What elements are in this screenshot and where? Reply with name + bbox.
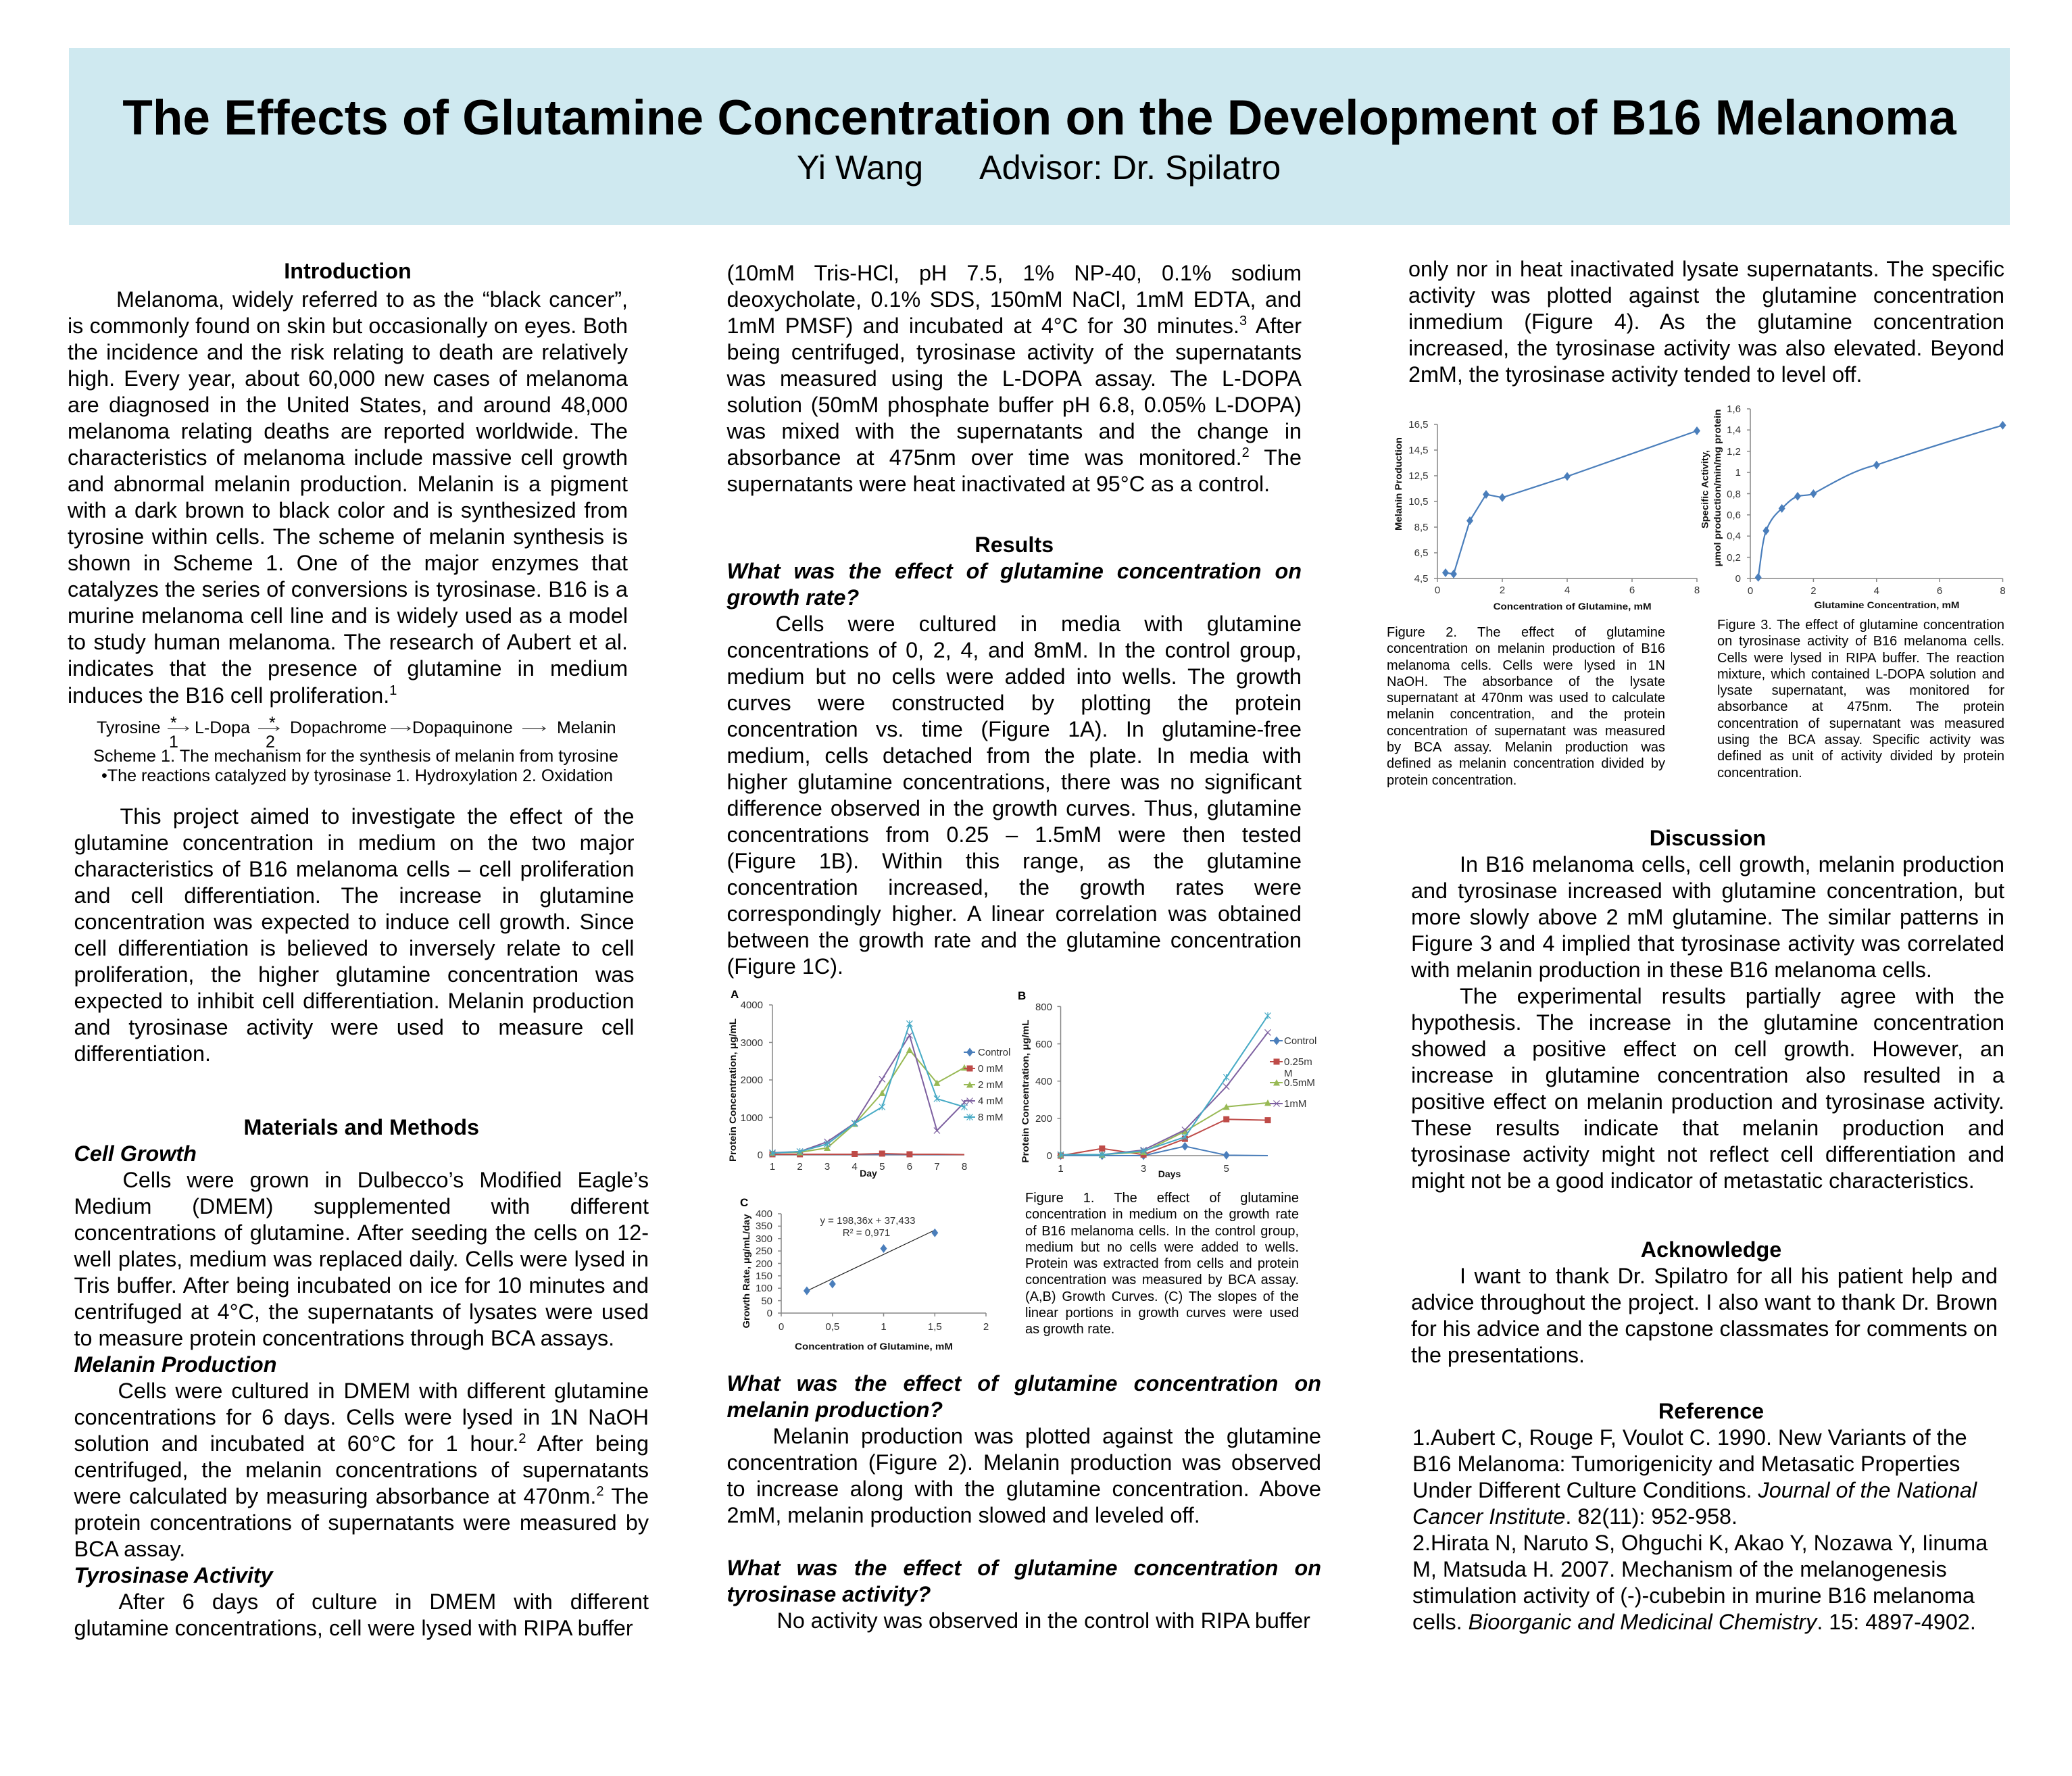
scheme 1: melanin synthesis: Dopaquinone bbox=[412, 718, 513, 737]
text block: introduction body: are diagnosed in the United States, and around 48,000 bbox=[68, 393, 628, 417]
chart: figure 3 tyrosinase activity: 0,4 bbox=[1727, 531, 1741, 542]
chart B: protein concentration vs days: 5 bbox=[1224, 1163, 1229, 1175]
caption: figure 3: concentration. bbox=[1717, 766, 1802, 781]
caption: figure 3 bbox=[1717, 618, 2004, 781]
text block: project aim: expected to inhibit cell differentiation. Melanin production bbox=[74, 989, 634, 1013]
chart: figure 2 melanin production bbox=[1393, 419, 1700, 612]
question: tyrosinase activity bbox=[727, 1556, 1321, 1606]
text block: growth rate results: concentrations of 0, 2, 4, and 8mM. In the control group, bbox=[727, 638, 1302, 662]
subheading: melanin production: Melanin Production bbox=[74, 1352, 276, 1377]
chart C: growth rate vs glutamine: 350 bbox=[756, 1220, 772, 1232]
text block: melanin results: to increase along with the glutamine concentration. Above bbox=[727, 1477, 1321, 1501]
chart: figure 2 melanin production: 2 bbox=[1500, 585, 1505, 596]
caption: figure 1: Protein was extracted from cells and protein bbox=[1025, 1256, 1299, 1271]
chart: figure 3 tyrosinase activity: 0,6 bbox=[1727, 510, 1741, 521]
chart: figure 3 tyrosinase activity bbox=[1699, 403, 2006, 610]
text block: tyrosinase results start: No activity was observed in the control with RIPA buffer bbox=[777, 1608, 1310, 1633]
text block: reference list: 2.Hirata N, Naruto S, Ohguchi K, Akao Y, Nozawa Y, Iinuma bbox=[1412, 1531, 1988, 1555]
chart: figure 2 melanin production: 4,5 bbox=[1414, 573, 1429, 585]
chart A: protein concentration vs day: 1 bbox=[770, 1161, 775, 1173]
text block: melanin production bbox=[74, 1379, 649, 1561]
text block: growth rate results: Cells were cultured in media with glutamine bbox=[776, 612, 1302, 636]
subheading: tyrosinase activity: Tyrosinase Activity bbox=[74, 1563, 273, 1587]
chart: figure 3 tyrosinase activity: 4 bbox=[1874, 585, 1879, 597]
legend: chart A: 4 mM bbox=[978, 1095, 1003, 1107]
panel: results growth rate bbox=[726, 533, 1302, 979]
chart B: protein concentration vs days: Protein Concentration, μg/mL bbox=[1020, 1019, 1031, 1163]
question: growth rate bbox=[726, 559, 1302, 610]
scheme 1: melanin synthesis: Melanin bbox=[557, 718, 616, 737]
panel: introduction bbox=[68, 259, 628, 707]
text block: cell growth: Tris buffer. After being incubated on ice for 10 minutes and bbox=[74, 1273, 649, 1298]
text block: melanin results: concentration (Figure 2). Melanin production was observed bbox=[727, 1450, 1321, 1475]
chart: figure 3 tyrosinase activity: 6 bbox=[1937, 585, 1942, 597]
text block: tyrosinase activity bbox=[74, 1589, 649, 1640]
chart: figure 3 tyrosinase activity: 1 bbox=[1735, 467, 1741, 478]
chart C: growth rate vs glutamine: C bbox=[740, 1196, 748, 1209]
arrow: dopaquinone to melanin bbox=[522, 726, 545, 731]
chart C: growth rate vs glutamine: Concentration of Glutamine, mM bbox=[795, 1341, 953, 1352]
scheme 1: melanin synthesis: * bbox=[269, 714, 276, 733]
title: The Effects of Glutamine Concentration on the Development of B16 Melanoma bbox=[122, 91, 1956, 145]
chart: figure 2 melanin production: 4 bbox=[1564, 585, 1570, 596]
caption: figure 1: linear portions in growth curves were used bbox=[1025, 1306, 1299, 1321]
chart: figure 2 melanin production: 0 bbox=[1435, 585, 1440, 596]
text block: reference list: Under Different Culture Conditions. Journal of the National bbox=[1412, 1478, 1977, 1502]
question: tyrosinase activity: What was the effect of glutamine concentration on bbox=[727, 1556, 1321, 1580]
chart C: growth rate vs glutamine: 2 bbox=[983, 1321, 989, 1333]
chart: figure 2 melanin production: 10,5 bbox=[1408, 496, 1429, 508]
text block: discussion body: more slowly above 2 mM glutamine. The similar patterns in bbox=[1411, 905, 2004, 929]
caption: figure 1: of B16 melanoma cells. In the control group, bbox=[1025, 1224, 1299, 1239]
legend: chart B: 1mM bbox=[1284, 1098, 1306, 1110]
text block: methods continued: solution (50mM phosphate buffer pH 6.8, 0.05% L-DOPA) bbox=[727, 393, 1302, 417]
scheme 1: melanin synthesis: Tyrosine bbox=[97, 718, 160, 737]
text block: tyrosinase activity: glutamine concentrations, cell were lysed with RIPA buffer bbox=[74, 1616, 633, 1640]
caption: figure 2: concentration of supernatant was measured bbox=[1387, 724, 1665, 739]
text block: methods continued: supernatants were heat inactivated at 95°C as a control. bbox=[727, 472, 1270, 496]
text block: melanin production: centrifuged, the melanin concentrations of supernatants bbox=[74, 1458, 649, 1482]
text block: growth rate results: medium, cells detached from the plate. In media with bbox=[727, 743, 1302, 768]
scheme 1: melanin synthesis bbox=[93, 714, 618, 785]
chart B: protein concentration vs days: Days bbox=[1158, 1168, 1181, 1179]
chart A: protein concentration vs day: 3000 bbox=[741, 1037, 763, 1049]
text block: growth rate results: difference observed in the growth curves. Thus, glutamine bbox=[727, 796, 1302, 820]
chart A: protein concentration vs day: 7 bbox=[934, 1161, 940, 1173]
chart: figure 2 melanin production: Concentration of Glutamine, mM bbox=[1494, 601, 1652, 612]
chart B: protein concentration vs days: 600 bbox=[1035, 1039, 1052, 1050]
heading: materials and methods: Materials and Methods bbox=[243, 1115, 479, 1139]
text block: introduction body: shown in Scheme 1. One of the major enzymes that bbox=[68, 551, 628, 575]
text block: melanin production: BCA assay. bbox=[74, 1537, 185, 1561]
caption: figure 3: concentration of supernatant was measured bbox=[1717, 716, 2004, 731]
chart: figure 3 tyrosinase activity: 2 bbox=[1810, 585, 1817, 597]
chart A: protein concentration vs day: 4 bbox=[852, 1161, 858, 1173]
caption: figure 1: as growth rate. bbox=[1025, 1322, 1114, 1337]
text block: introduction body: murine melanoma cell line and is widely used as a model bbox=[68, 603, 628, 628]
text block: melanin production: solution and incubated at 60°C for 1 hour.2 After being bbox=[74, 1431, 649, 1456]
question: melanin production bbox=[727, 1371, 1321, 1422]
caption: figure 3: defined as unit of activity divided by protein bbox=[1717, 749, 2004, 764]
legend: chart A bbox=[964, 1047, 1010, 1123]
text block: project aim bbox=[74, 804, 634, 1066]
chart: figure 2 melanin production: Melanin Production bbox=[1393, 437, 1404, 531]
text block: introduction body: melanoma relating deaths are reported worldwide. The bbox=[68, 419, 628, 443]
chart C: growth rate vs glutamine: R² = 0,971 bbox=[843, 1227, 890, 1239]
scheme 1: melanin synthesis: * bbox=[170, 714, 177, 733]
text block: introduction body: characteristics of melanoma include massive cell growth bbox=[68, 445, 628, 470]
text block: tyrosinase results continued: inmedium (Figure 4). As the glutamine concentration bbox=[1408, 310, 2004, 334]
text block: discussion body: In B16 melanoma cells, cell growth, melanin production bbox=[1460, 852, 2004, 877]
text block: growth rate results: medium but no cells were added into wells. The growth bbox=[727, 664, 1302, 689]
heading: discussion: Discussion bbox=[1650, 826, 1766, 850]
caption: figure 1 bbox=[1025, 1191, 1299, 1337]
chart C: growth rate vs glutamine: 0,5 bbox=[825, 1321, 839, 1333]
chart B: protein concentration vs days: 0 bbox=[1047, 1150, 1052, 1162]
text block: tyrosinase results continued: increased, the tyrosinase activity was also elevated. Beyond bbox=[1408, 336, 2004, 360]
text block: cell growth: to measure protein concentrations through BCA assays. bbox=[74, 1326, 614, 1350]
text block: discussion body: increase in glutamine concentration also resulted in a bbox=[1411, 1063, 2004, 1087]
text block: introduction body: is commonly found on skin but occasionally on eyes. Both bbox=[68, 314, 628, 338]
chart A: protein concentration vs day: 5 bbox=[879, 1161, 885, 1173]
text block: discussion body: positive effect on melanin production and tyrosinase activity. bbox=[1411, 1089, 2004, 1114]
chart: figure 3 tyrosinase activity: Specific Activity, bbox=[1699, 450, 1710, 528]
text block: acknowledge body: advice throughout the project. I also want to thank Dr. Brown bbox=[1411, 1290, 1998, 1314]
legend: chart A: 0 mM bbox=[978, 1063, 1003, 1075]
chart C: growth rate vs glutamine: 0 bbox=[779, 1321, 784, 1333]
chart: figure 2 melanin production: 8 bbox=[1694, 585, 1700, 596]
chart: figure 2 melanin production: 6 bbox=[1629, 585, 1635, 596]
text block: project aim: and tyrosinase activity were used to measure cell bbox=[74, 1015, 634, 1039]
text block: reference list: B16 Melanoma: Tumorigenicity and Metasatic Properties bbox=[1412, 1452, 1960, 1476]
chart B: protein concentration vs days bbox=[1018, 989, 1316, 1179]
text block: introduction body: with a dark brown to black color and is synthesized from bbox=[68, 498, 628, 522]
text block: introduction body: catalyzes the series of conversions is tyrosinase. B16 is a bbox=[68, 577, 628, 601]
caption: figure 2: NaOH. The absorbance of the lysate bbox=[1387, 674, 1665, 689]
text block: growth rate results: (Figure 1B). Within this range, as the glutamine bbox=[727, 849, 1302, 873]
text block: tyrosinase results continued: 2mM, the tyrosinase activity tended to level off. bbox=[1408, 362, 1862, 387]
chart: figure 3 tyrosinase activity: 1,2 bbox=[1727, 446, 1741, 458]
legend: chart A: Control bbox=[978, 1047, 1010, 1058]
caption: figure 2 bbox=[1387, 625, 1665, 788]
chart: figure 3 tyrosinase activity: 1,6 bbox=[1727, 403, 1741, 415]
chart A: protein concentration vs day bbox=[727, 988, 1010, 1179]
text block: project aim: characteristics of B16 melanoma cells – cell proliferation bbox=[74, 857, 634, 881]
chart C: growth rate vs glutamine: 300 bbox=[756, 1233, 772, 1245]
text block: introduction body: high. Every year, about 60,000 new cases of melanoma bbox=[68, 366, 628, 391]
chart C: growth rate vs glutamine: 1,5 bbox=[928, 1321, 942, 1333]
chart B: protein concentration vs days: B bbox=[1018, 989, 1026, 1002]
chart: figure 2 melanin production: 6,5 bbox=[1414, 547, 1429, 559]
legend: chart B bbox=[1270, 1035, 1316, 1110]
text block: introduction body: the incidence and the risk relating to death are relatively bbox=[68, 340, 628, 364]
chart B: protein concentration vs days: 3 bbox=[1141, 1163, 1146, 1175]
chart: figure 2 melanin production: 8,5 bbox=[1414, 522, 1429, 533]
text block: introduction body: and abnormal melanin production. Melanin is a pigment bbox=[68, 472, 628, 496]
text block: introduction body: to study human melanoma. The research of Aubert et al. bbox=[68, 630, 628, 654]
scheme 1: melanin synthesis: Scheme 1. The mechanism for the synthesis of melanin from tyrosine bbox=[93, 747, 618, 766]
chart B: protein concentration vs days: 800 bbox=[1035, 1002, 1052, 1013]
caption: figure 2: melanoma cells. Cells were lysed in 1N bbox=[1387, 658, 1665, 673]
text block: introduction body: induces the B16 cell proliferation.1 bbox=[68, 683, 397, 707]
caption: figure 3: lysate supernatant, was monitored for bbox=[1717, 683, 2004, 698]
caption: figure 1: medium but no cells were added to wells. bbox=[1025, 1240, 1299, 1255]
text block: cell growth: Cells were grown in Dulbecco’s Modified Eagle’s bbox=[123, 1168, 649, 1192]
text block: discussion body: showed a positive effect on cell growth. However, an bbox=[1411, 1037, 2004, 1061]
chart A: protein concentration vs day: 1000 bbox=[741, 1112, 763, 1124]
question: tyrosinase activity: tyrosinase activity? bbox=[727, 1582, 931, 1606]
text block: introduction body bbox=[68, 287, 628, 707]
text block: reference list: cells. Bioorganic and Medicinal Chemistry. 15: 4897-4902. bbox=[1412, 1610, 1976, 1634]
panel: discussion bbox=[1411, 826, 2004, 1193]
chart B: protein concentration vs days: 200 bbox=[1035, 1113, 1052, 1125]
chart: figure 3 tyrosinase activity: 0 bbox=[1748, 585, 1753, 597]
heading: acknowledge: Acknowledge bbox=[1641, 1237, 1781, 1262]
caption: figure 2: defined as melanin concentration divided by bbox=[1387, 756, 1665, 771]
text block: cell growth: Medium (DMEM) supplemented with different bbox=[74, 1194, 649, 1218]
text block: growth rate results: higher glutamine concentrations, there was no significant bbox=[727, 770, 1302, 794]
chart C: growth rate vs glutamine: Growth Rate, μg/mL/day bbox=[741, 1214, 751, 1328]
caption: figure 2: by BCA assay. Melanin production was bbox=[1387, 740, 1665, 755]
caption: figure 2: concentration on melanin production of B16 bbox=[1387, 641, 1665, 656]
text block: reference list: Cancer Institute. 82(11): 952-958. bbox=[1412, 1504, 1737, 1529]
text block: melanin results: Melanin production was plotted against the glutamine bbox=[773, 1424, 1321, 1448]
chart A: protein concentration vs day: Day bbox=[860, 1168, 877, 1179]
text block: tyrosinase results continued: activity was plotted against the glutamine concentration bbox=[1408, 283, 2004, 307]
chart: figure 2 melanin production: 16,5 bbox=[1408, 419, 1429, 430]
text block: discussion body: might not be a good indicator of metastatic characteristics. bbox=[1411, 1168, 1975, 1193]
scheme 1: melanin synthesis: 2 bbox=[266, 733, 275, 751]
text block: introduction body: indicates that the presence of glutamine in medium bbox=[68, 656, 628, 681]
caption: figure 2: Figure 2. The effect of glutamine bbox=[1387, 625, 1665, 640]
panel: acknowledge bbox=[1411, 1237, 1998, 1367]
text block: project aim: proliferation, the higher glutamine concentration was bbox=[74, 962, 634, 987]
text block: acknowledge body: for his advice and the capstone classmates for comments on bbox=[1411, 1316, 1998, 1341]
text block: project aim: glutamine concentration in medium on the two major bbox=[74, 831, 634, 855]
scheme 1: melanin synthesis: Dopachrome bbox=[290, 718, 387, 737]
chart: figure 3 tyrosinase activity: 0 bbox=[1735, 573, 1741, 585]
text block: methods continued bbox=[727, 261, 1302, 496]
text block: project aim: differentiation. bbox=[74, 1041, 211, 1066]
caption: figure 3: Figure 3. The effect of glutamine concentration bbox=[1717, 618, 2004, 633]
chart C: growth rate vs glutamine: 400 bbox=[756, 1208, 772, 1220]
text block: discussion body: and tyrosinase increased with glutamine concentration, but bbox=[1411, 879, 2004, 903]
caption: figure 3: absorbance at 475nm. The protein bbox=[1717, 699, 2004, 714]
chart B: protein concentration vs days: 400 bbox=[1035, 1076, 1052, 1087]
caption: figure 3: using the BCA assay. Specific activity was bbox=[1717, 733, 2004, 747]
text block: discussion body: The experimental results partially agree with the bbox=[1460, 984, 2004, 1008]
caption: figure 3: mixture, which contained L-DOPA solution and bbox=[1717, 667, 2004, 682]
text block: melanin production: concentrations for 6 days. Cells were lysed in 1N NaOH bbox=[74, 1405, 649, 1429]
text block: introduction body: Melanoma, widely referred to as the “black cancer”, bbox=[116, 287, 628, 312]
text block: acknowledge body: the presentations. bbox=[1411, 1343, 1585, 1367]
caption: figure 3: Cells were lysed in RIPA buffer. The reaction bbox=[1717, 651, 2004, 666]
heading: reference: Reference bbox=[1658, 1399, 1764, 1423]
text block: discussion body: tyrosinase activity might not reflect cell differentiation and bbox=[1411, 1142, 2004, 1166]
heading: introduction: Introduction bbox=[284, 259, 412, 283]
text block: acknowledge body: I want to thank Dr. Spilatro for all his patient help and bbox=[1460, 1264, 1998, 1288]
text block: discussion body: with melanin production in these B16 melanoma cells. bbox=[1411, 958, 1932, 982]
legend: chart A: 2 mM bbox=[978, 1079, 1003, 1091]
text block: reference list: M, Matsuda H. 2007. Mechanism of the melanogenesis bbox=[1412, 1557, 1947, 1581]
text block: methods continued: absorbance at 475nm over time was monitored.2 The bbox=[727, 445, 1302, 470]
arrow: tyrosine to L-Dopa bbox=[168, 726, 189, 731]
chart: figure 3 tyrosinase activity: 8 bbox=[2000, 585, 2006, 597]
arrow: L-Dopa to dopachrome bbox=[258, 726, 279, 731]
text block: project aim: This project aimed to investigate the effect of the bbox=[120, 804, 634, 829]
text block: growth rate results: concentration increased, the growth rates were bbox=[727, 875, 1302, 899]
text block: growth rate results: curves were constructed by plotting the protein bbox=[727, 691, 1302, 715]
text block: growth rate results: correspondingly higher. A linear correlation was obtained bbox=[727, 902, 1302, 926]
chart A: protein concentration vs day: 4000 bbox=[741, 1000, 763, 1011]
text block: cell growth: centrifuged at 4°C, the supernatants of lysates were used bbox=[74, 1300, 649, 1324]
chart C: growth rate vs glutamine: 100 bbox=[756, 1283, 772, 1294]
caption: figure 2: melanin concentration, and the protein bbox=[1387, 707, 1665, 722]
chart C: growth rate vs glutamine: y = 198,36x + 37,433 bbox=[820, 1215, 915, 1227]
arrow: dopachrome to dopaquinone bbox=[391, 726, 410, 731]
text block: discussion body: hypothesis. The increase in the glutamine concentration bbox=[1411, 1010, 2004, 1035]
text block: tyrosinase activity: After 6 days of culture in DMEM with different bbox=[119, 1589, 649, 1614]
question: melanin production: melanin production? bbox=[727, 1398, 943, 1422]
caption: figure 1: Figure 1. The effect of glutamine bbox=[1025, 1191, 1299, 1206]
chart A: protein concentration vs day: 0 bbox=[758, 1150, 763, 1161]
question: melanin production: What was the effect of glutamine concentration on bbox=[727, 1371, 1321, 1395]
text block: tyrosinase results continued bbox=[1408, 257, 2004, 387]
chart: figure 3 tyrosinase activity: Glutamine Concentration, mM bbox=[1814, 599, 1960, 610]
legend: chart B: 0.5mM bbox=[1284, 1077, 1315, 1089]
text block: melanin production: protein concentrations of supernatants were measured by bbox=[74, 1510, 649, 1535]
heading: results: Results bbox=[975, 533, 1054, 557]
text block: methods continued: (10mM Tris-HCl, pH 7.5, 1% NP-40, 0.1% sodium bbox=[727, 261, 1302, 285]
text block: methods continued: was measured using the L-DOPA assay. The L-DOPA bbox=[727, 366, 1302, 391]
text block: cell growth bbox=[74, 1168, 649, 1350]
chart A: protein concentration vs day: Protein Concentration, μg/mL bbox=[727, 1018, 738, 1162]
text block: methods continued: 1mM PMSF) and incubated at 4°C for 30 minutes.3 After bbox=[727, 314, 1302, 338]
chart C: growth rate vs glutamine: 250 bbox=[756, 1245, 772, 1257]
chart A: protein concentration vs day: 2 bbox=[797, 1161, 803, 1173]
text block: discussion body: These results indicate that melanin production and bbox=[1411, 1116, 2004, 1140]
chart: figure 3 tyrosinase activity: 0,8 bbox=[1727, 489, 1741, 500]
advisor: Advisor: Dr. Spilatro bbox=[979, 148, 1281, 187]
text block: cell growth: concentrations of glutamine. After seeding the cells on 12- bbox=[74, 1220, 649, 1245]
chart: figure 3 tyrosinase activity: 1,4 bbox=[1727, 424, 1741, 436]
chart A: protein concentration vs day: 3 bbox=[824, 1161, 830, 1173]
text block: discussion body bbox=[1411, 852, 2004, 1193]
text block: growth rate results: (Figure 1C). bbox=[727, 954, 843, 979]
text block: acknowledge body bbox=[1411, 1264, 1998, 1367]
text block: reference list: 1.Aubert C, Rouge F, Voulot C. 1990. New Variants of the bbox=[1412, 1425, 1967, 1450]
chart: figure 3 tyrosinase activity: μmol production/min/mg protein bbox=[1712, 410, 1723, 566]
caption: figure 1: concentration in medium on the growth rate bbox=[1025, 1207, 1299, 1222]
text block: introduction body: tyrosine within cells. The scheme of melanin synthesis is bbox=[68, 524, 628, 549]
text block: melanin production: were calculated by measuring absorbance at 470nm.2 The bbox=[74, 1484, 649, 1508]
chart C: growth rate vs glutamine: 200 bbox=[756, 1258, 772, 1270]
panel: results melanin and tyrosinase bbox=[727, 1371, 1321, 1633]
caption: figure 2: protein concentration. bbox=[1387, 773, 1516, 788]
text block: project aim: and cell differentiation. The increase in glutamine bbox=[74, 883, 634, 908]
text block: tyrosinase results continued: only nor in heat inactivated lysate supernatants. The specific bbox=[1408, 257, 2004, 281]
caption: figure 1: concentration was measured by BCA assay. bbox=[1025, 1273, 1299, 1287]
author: Yi Wang bbox=[797, 148, 923, 187]
text block: melanin production: Cells were cultured in DMEM with different glutamine bbox=[118, 1379, 649, 1403]
text block: melanin results: 2mM, melanin production slowed and leveled off. bbox=[727, 1503, 1200, 1527]
caption: figure 2: supernatant at 470nm was used to calculate bbox=[1387, 691, 1665, 706]
chart: figure 2 melanin production: 12,5 bbox=[1408, 470, 1429, 482]
text block: growth rate results bbox=[727, 612, 1302, 979]
chart C: growth rate vs glutamine: 1 bbox=[881, 1321, 887, 1333]
question: growth rate: growth rate? bbox=[727, 585, 859, 610]
title banner bbox=[69, 48, 2010, 225]
panel: materials and methods bbox=[74, 1115, 649, 1640]
text block: project aim: cell differentiation is believed to inversely relate to cell bbox=[74, 936, 634, 960]
chart C: growth rate vs glutamine: 50 bbox=[761, 1296, 772, 1307]
legend: chart B: Control bbox=[1284, 1035, 1316, 1047]
caption: figure 1: (A,B) Growth Curves. (C) The slopes of the bbox=[1025, 1289, 1299, 1304]
chart C: growth rate vs glutamine bbox=[740, 1196, 989, 1352]
text block: growth rate results: concentrations from 0.25 – 1.5mM were then tested bbox=[727, 822, 1302, 847]
legend: chart B: 0.25m bbox=[1284, 1056, 1312, 1068]
text block: reference list bbox=[1412, 1425, 1988, 1634]
text block: methods continued: deoxycholate, 0.1% SDS, 150mM NaCl, 1mM EDTA, and bbox=[727, 287, 1302, 312]
caption: figure 3: on tyrosinase activity of B16 melanoma cells. bbox=[1717, 634, 2004, 649]
chart A: protein concentration vs day: 6 bbox=[907, 1161, 912, 1173]
chart C: growth rate vs glutamine: 150 bbox=[756, 1271, 772, 1282]
scheme 1: melanin synthesis: 1 bbox=[169, 733, 178, 751]
text block: cell growth: well plates, medium was replaced daily. Cells were lysed in bbox=[74, 1247, 649, 1271]
legend: chart B: M bbox=[1284, 1068, 1292, 1079]
chart A: protein concentration vs day: 8 bbox=[962, 1161, 967, 1173]
text block: reference list: stimulation activity of (-)-cubebin in murine B16 melanoma bbox=[1412, 1583, 1975, 1608]
chart C: growth rate vs glutamine: 0 bbox=[767, 1308, 772, 1319]
subheading: cell growth: Cell Growth bbox=[74, 1141, 197, 1166]
legend: chart A: 8 mM bbox=[978, 1112, 1003, 1123]
text block: methods continued: was mixed with the supernatants and the change in bbox=[727, 419, 1302, 443]
scheme 1: melanin synthesis: •The reactions catalyzed by tyrosinase 1. Hydroxylation 2. Oxidation bbox=[101, 766, 613, 785]
text block: growth rate results: concentration vs. time (Figure 1A). In glutamine-free bbox=[727, 717, 1302, 741]
panel: reference bbox=[1412, 1399, 1988, 1634]
chart B: protein concentration vs days: 1 bbox=[1058, 1163, 1064, 1175]
scheme 1: melanin synthesis: L-Dopa bbox=[195, 718, 250, 737]
chart: figure 3 tyrosinase activity: 0,2 bbox=[1727, 552, 1741, 564]
text block: project aim: concentration was expected to induce cell growth. Since bbox=[74, 910, 634, 934]
text block: methods continued: being centrifuged, tyrosinase activity of the supernatants bbox=[727, 340, 1302, 364]
text block: melanin results bbox=[727, 1424, 1321, 1527]
chart: figure 2 melanin production: 14,5 bbox=[1408, 445, 1429, 456]
text block: discussion body: Figure 3 and 4 implied that tyrosinase activity was correlated bbox=[1411, 931, 2004, 956]
question: growth rate: What was the effect of glutamine concentration on bbox=[727, 559, 1302, 583]
chart A: protein concentration vs day: 2000 bbox=[741, 1075, 763, 1086]
chart A: protein concentration vs day: A bbox=[731, 988, 739, 1001]
text block: growth rate results: between the growth rate and the glutamine concentration bbox=[727, 928, 1302, 952]
